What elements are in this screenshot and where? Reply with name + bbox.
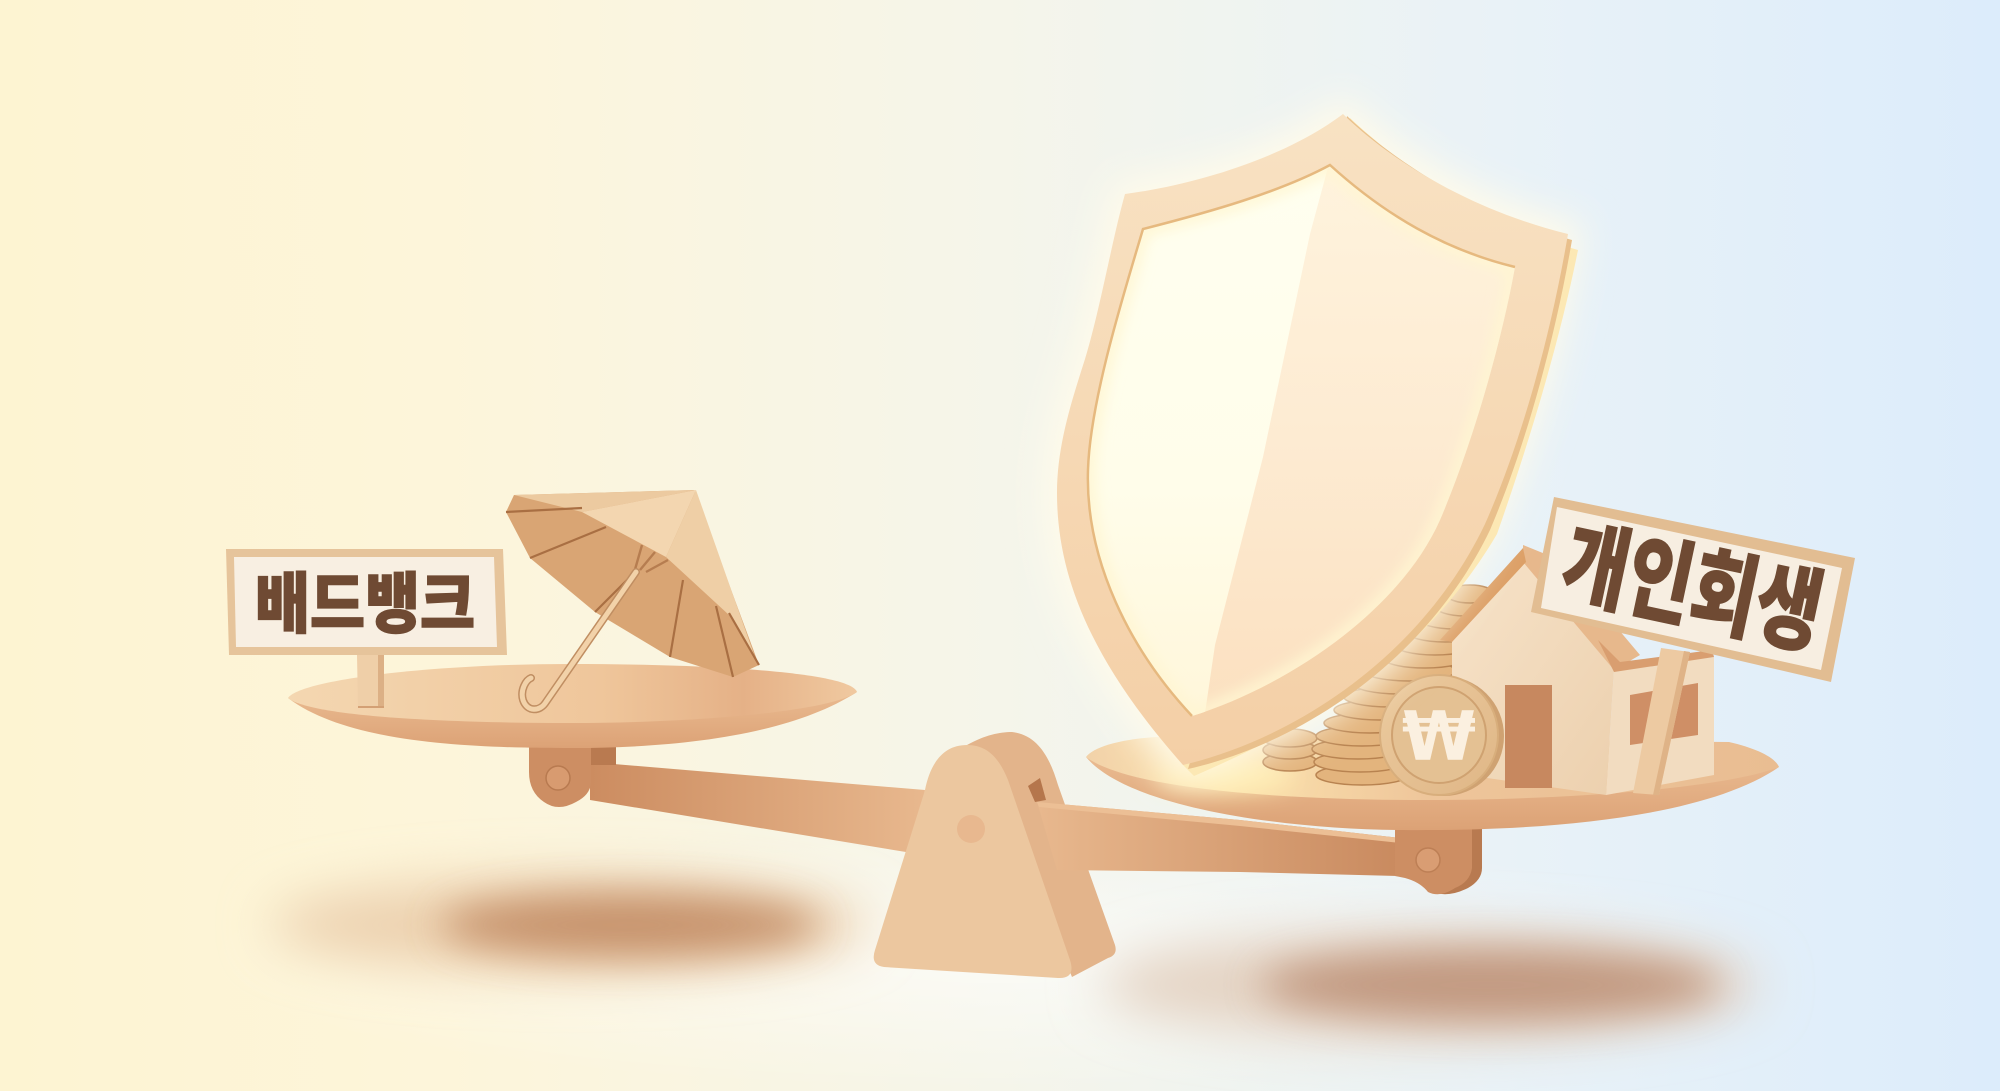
left sign post: [357, 655, 384, 707]
shield inner panel: [1089, 166, 1515, 716]
shield inner edge line: [1088, 165, 1515, 716]
right pan: [1086, 737, 1779, 830]
fulcrum slot: [1028, 778, 1046, 802]
shield back rim: [1183, 118, 1578, 776]
icon: won coin: ₩: [1402, 698, 1476, 777]
coin stacks: [1263, 585, 1495, 785]
left scale arm: [590, 762, 925, 853]
glowing shield: [1057, 114, 1578, 776]
left sign: 배드뱅크: [226, 549, 507, 655]
icon: won coin: [1380, 675, 1504, 796]
fulcrum side face: [967, 732, 1116, 977]
right sign: 개인회생: 개인회생: [1553, 512, 1831, 666]
shield middle rim: [1188, 116, 1572, 769]
right pan bracket: [1395, 825, 1482, 894]
right sign post: [1633, 648, 1690, 795]
icon: umbrella: [506, 490, 759, 709]
shield frame face: [1057, 114, 1568, 765]
left sign: 배드뱅크: 배드뱅크: [255, 567, 475, 641]
fulcrum pivot pin: [957, 815, 985, 843]
left pan bracket: [529, 745, 616, 807]
fulcrum front face: [874, 745, 1072, 978]
right scale arm: [1037, 802, 1400, 876]
left pan: [288, 664, 857, 748]
ground shadow under left pan: [270, 879, 870, 971]
icon: house: [1440, 545, 1714, 795]
ground shadow under right pan: [1100, 931, 1760, 1039]
shield outer glow: [1057, 114, 1568, 765]
